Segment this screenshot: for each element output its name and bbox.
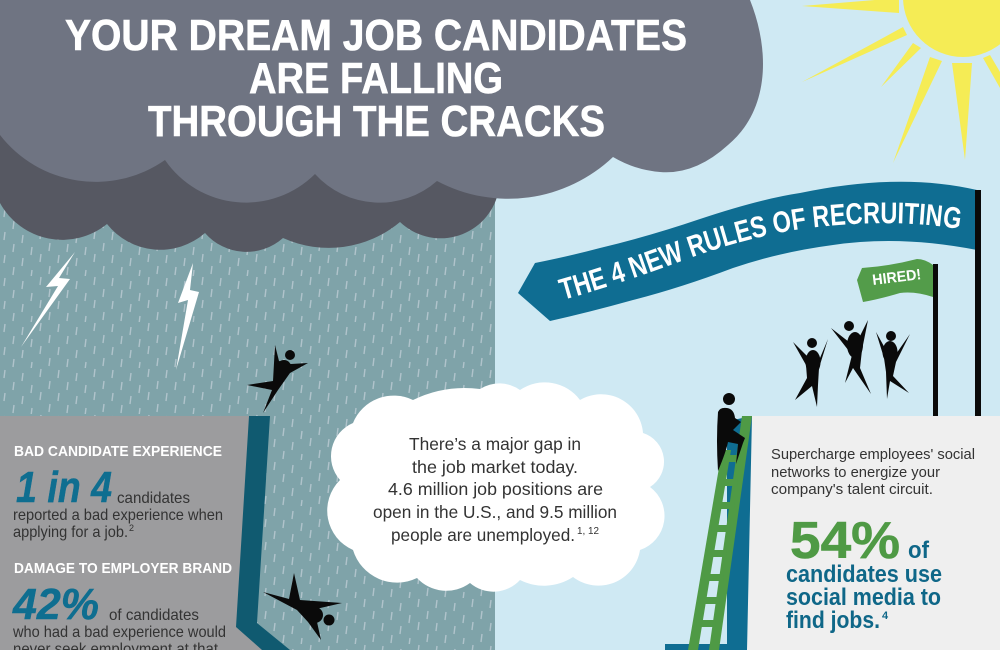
storm cloud <box>0 0 763 203</box>
rain background <box>0 180 495 650</box>
storm cloud dark underside <box>0 120 497 252</box>
people cheering <box>793 320 910 407</box>
falling figure 2 <box>263 573 342 640</box>
stat: 42% <box>12 580 99 629</box>
text block: who had a bad experience would <box>12 624 226 641</box>
text block: of candidates <box>109 607 199 624</box>
text block: reported a bad experience when <box>13 507 223 524</box>
teal wall <box>236 416 290 650</box>
text block <box>12 607 226 650</box>
flag: hired <box>857 259 933 302</box>
stat caption: 4 <box>882 610 889 622</box>
banner: the 4 new rules of recruiting: THE 4 NEW RULES OF RECRUITING <box>558 202 960 298</box>
title: THROUGH THE CRACKS <box>148 97 605 146</box>
climbing figure <box>717 393 745 471</box>
panel: social networks <box>747 416 1000 650</box>
text block <box>771 446 975 498</box>
text block <box>13 490 223 541</box>
stat caption: candidates use <box>786 561 942 588</box>
text block: applying for a job. <box>13 524 128 541</box>
callout text: the job market today. <box>412 457 578 477</box>
heading: DAMAGE TO EMPLOYER BRAND <box>14 560 232 577</box>
icon: sun <box>802 0 1000 163</box>
callout text: people are unemployed. <box>391 525 575 545</box>
falling figure 1 <box>247 345 308 413</box>
flag pole: small <box>933 264 938 417</box>
icon: lightning bolts <box>21 252 199 370</box>
title: ARE FALLING <box>249 54 503 103</box>
text block: Supercharge employees' social <box>771 446 975 463</box>
title <box>65 11 687 146</box>
white cloud callout <box>327 382 665 592</box>
stat: 1 in 4 <box>16 463 112 512</box>
callout text: open in the U.S., and 9.5 million <box>373 502 617 522</box>
text block: candidates <box>117 490 190 507</box>
callout text: 4.6 million job positions are <box>388 479 603 499</box>
stat caption: find jobs. <box>786 607 880 634</box>
stat caption: of <box>908 537 930 564</box>
text block: 2 <box>129 523 134 533</box>
text block: networks to energize your <box>771 464 940 481</box>
text block: company's talent circuit. <box>771 481 933 498</box>
flag pole: large <box>975 190 981 417</box>
title: YOUR DREAM JOB CANDIDATES <box>65 11 687 60</box>
panel: bad candidate experience <box>0 416 290 650</box>
stat: 54%: 54% <box>790 512 900 570</box>
heading: BAD CANDIDATE EXPERIENCE <box>14 443 222 460</box>
flag: hired: HIRED! <box>871 266 922 289</box>
stat caption <box>786 537 942 634</box>
ladder <box>688 416 752 650</box>
callout text: 1, 12 <box>577 526 599 537</box>
callout text <box>373 434 617 545</box>
callout text: There’s a major gap in <box>409 434 581 454</box>
teal wall and base with ladder <box>665 393 752 650</box>
stat caption: social media to <box>786 584 941 611</box>
